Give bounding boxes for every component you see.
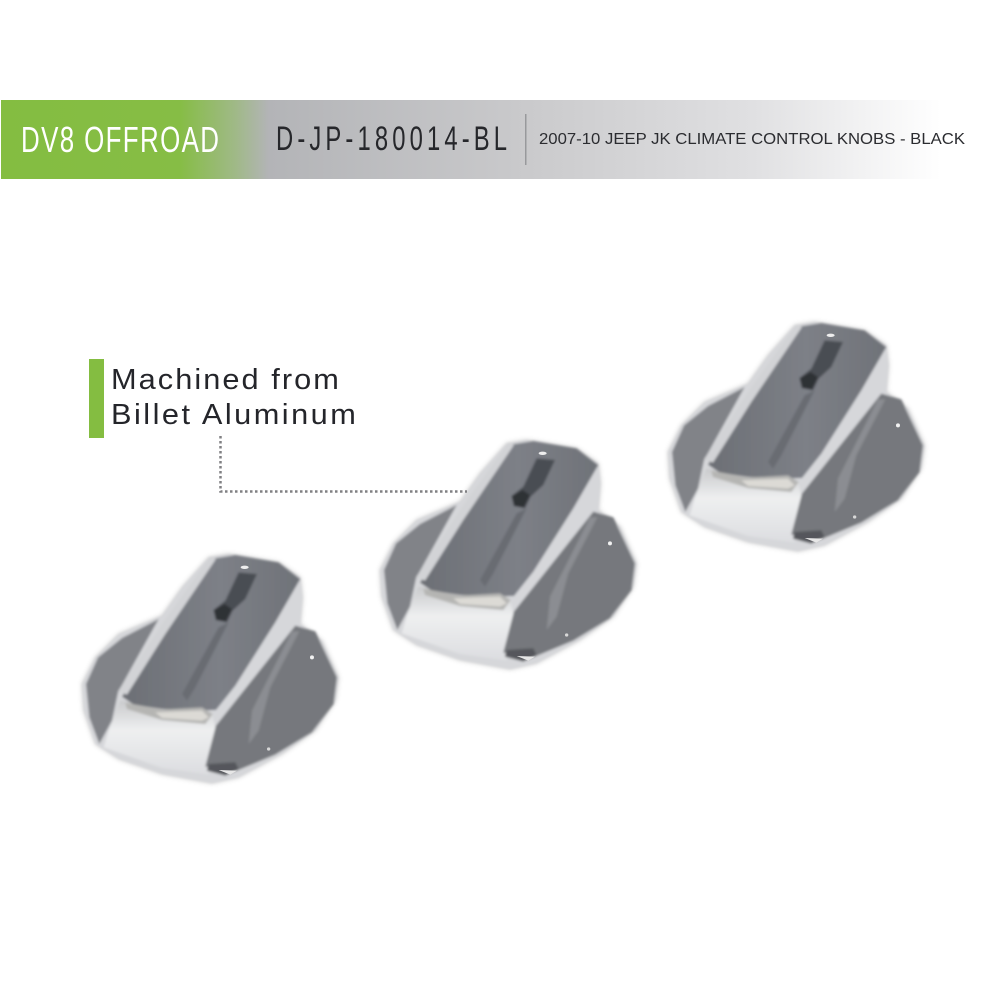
callout text: Machined from (111, 364, 339, 396)
knob: left (82, 554, 339, 783)
header banner (1, 100, 965, 179)
part number: D-JP-180014-BL (276, 120, 507, 158)
knob: right (668, 322, 925, 551)
callout text (111, 364, 356, 431)
callout: machined from billet aluminum (89, 359, 356, 438)
product title: 2007-10 JEEP JK CLIMATE CONTROL KNOBS - BLACK (539, 131, 965, 148)
callout accent bar (89, 359, 104, 438)
callout leader line (220, 436, 467, 492)
knob: middle (380, 440, 637, 669)
callout text: Billet Aluminum (111, 399, 356, 431)
brand name: DV8 OFFROAD (21, 120, 219, 160)
